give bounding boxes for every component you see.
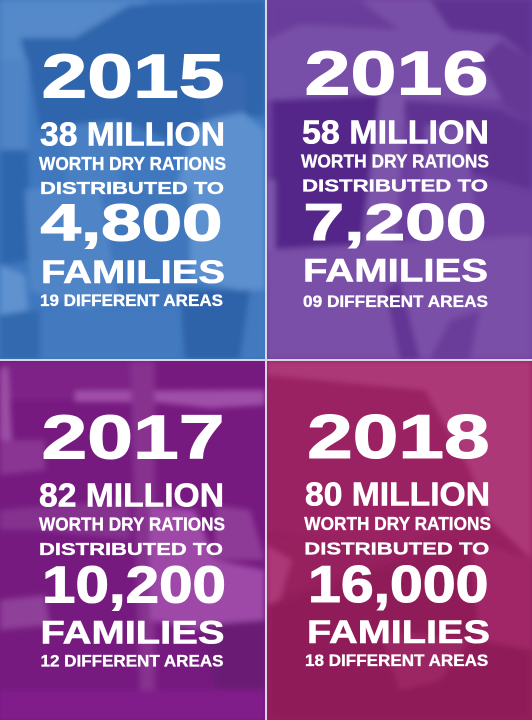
year heading: 2016 [304, 40, 488, 108]
areas count: 09 DIFFERENT AREAS [303, 292, 488, 311]
panel: 2017 [0, 361, 265, 720]
panel: 2015 [0, 0, 265, 359]
distributed label: DISTRIBUTED TO [39, 539, 223, 559]
families label: FAMILIES [41, 254, 225, 290]
families label: FAMILIES [40, 614, 224, 650]
areas count: 18 DIFFERENT AREAS [305, 651, 488, 670]
rations label: WORTH DRY RATIONS [304, 513, 491, 534]
photo background: magenta tinted scene [0, 361, 265, 720]
panel: 2018 [267, 361, 532, 720]
families count: 10,200 [42, 556, 226, 614]
year heading: 2018 [307, 403, 490, 472]
rations label: WORTH DRY RATIONS [39, 514, 225, 535]
amount: 38 MILLION [40, 116, 225, 152]
distributed label: DISTRIBUTED TO [40, 178, 224, 198]
photo background: blue tinted crowd [0, 0, 265, 359]
families label: FAMILIES [307, 614, 490, 650]
panel: 2016 [267, 0, 532, 359]
distributed label: DISTRIBUTED TO [302, 176, 488, 196]
amount: 82 MILLION [39, 477, 224, 514]
families count: 7,200 [304, 194, 486, 252]
rations label: WORTH DRY RATIONS [39, 153, 226, 174]
families count: 4,800 [40, 194, 222, 252]
amount: 58 MILLION [302, 114, 489, 150]
areas count: 19 DIFFERENT AREAS [40, 291, 223, 310]
amount: 80 MILLION [305, 476, 490, 513]
photo background: purple tinted hut [267, 0, 532, 359]
year heading: 2017 [42, 404, 224, 472]
families count: 16,000 [308, 556, 488, 614]
families label: FAMILIES [303, 253, 488, 289]
photo background: pink tinted banner [267, 361, 532, 720]
areas count: 12 DIFFERENT AREAS [40, 652, 224, 671]
year heading: 2015 [42, 42, 224, 112]
distributed label: DISTRIBUTED TO [304, 538, 489, 558]
rations label: WORTH DRY RATIONS [301, 150, 489, 172]
